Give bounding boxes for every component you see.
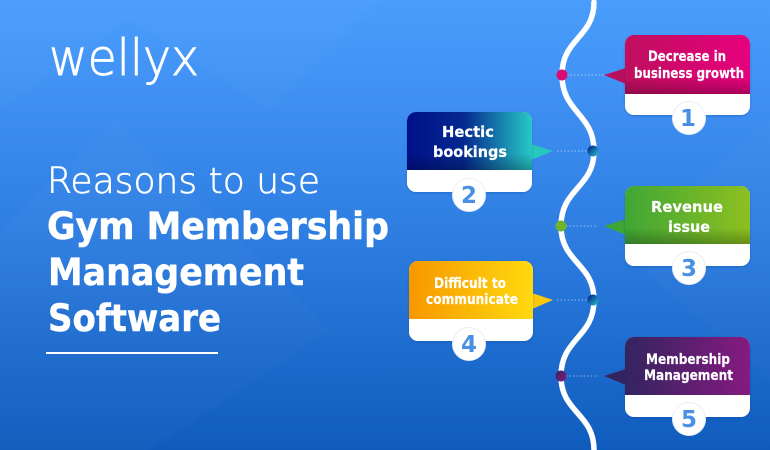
card 2: hectic bookings: 2 (461, 183, 477, 209)
card 3: revenue issue: issue (668, 218, 710, 236)
card 1: decrease in business growth: 1 (680, 106, 696, 132)
card 4: difficult to communicate: Difficult to (434, 276, 506, 292)
card 1: decrease in business growth (556, 35, 750, 134)
card 4: difficult to communicate: 4 (461, 332, 477, 358)
card 5: membership management: Membership (646, 352, 730, 368)
card 3: revenue issue (556, 186, 750, 284)
card 4: difficult to communicate: communicate (426, 292, 518, 308)
card 2: hectic bookings: bookings (433, 143, 507, 161)
logo: wellyx: wellyx (49, 29, 199, 87)
title: Management (48, 251, 304, 294)
card 5: membership management: Management (644, 368, 733, 384)
card 4: difficult to communicate (409, 261, 598, 360)
title (47, 161, 389, 340)
card 3: revenue issue: Revenue (651, 198, 723, 216)
title: Reasons to use (47, 161, 320, 202)
title: Gym Membership (47, 205, 389, 248)
card 5: membership management (556, 337, 750, 436)
title underline (46, 352, 218, 354)
card 3: revenue issue: 3 (681, 256, 697, 282)
card 2: hectic bookings: Hectic (442, 123, 494, 141)
card 1: decrease in business growth: business growth (634, 66, 744, 82)
card 5: membership management: 5 (681, 407, 697, 433)
timeline wave (561, 2, 594, 450)
card 1: decrease in business growth: Decrease in (648, 49, 726, 65)
card 2: hectic bookings (407, 112, 598, 212)
title: Software (48, 297, 221, 340)
